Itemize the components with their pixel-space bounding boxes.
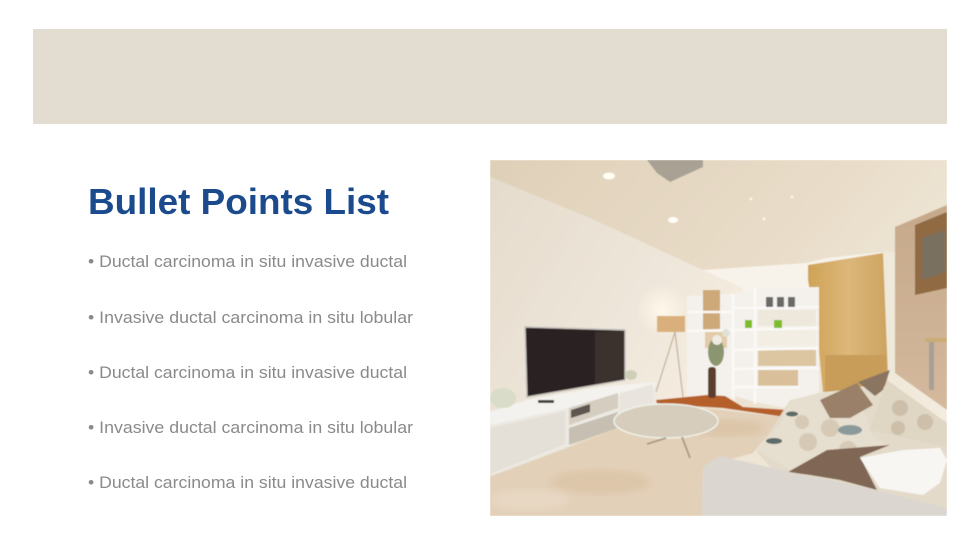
shelf ornaments [766,297,795,307]
wood wall [895,205,947,410]
bullet 1: • Ductal carcinoma in situ invasive ductal [88,252,407,271]
left wall [490,177,743,422]
photo: living room [490,160,947,516]
bullet 3: • Ductal carcinoma in situ invasive ductal [88,363,407,382]
lights [603,172,793,223]
flowers [490,388,516,408]
rug [490,403,783,516]
sofa arm [702,456,947,516]
ceiling vent [647,160,703,182]
curtain [808,253,888,392]
glass table [614,404,718,458]
bullet 2: • Invasive ductal carcinoma in situ lobular [88,308,413,327]
tv stand [490,382,655,476]
wood floor [656,395,787,417]
text block: heading and bullets [88,181,413,492]
ceiling [490,160,947,516]
shelving unit [687,287,819,408]
painting [915,212,947,295]
bright back wall [703,252,883,310]
TV [525,327,625,397]
lamp glow [636,284,688,336]
banner [33,29,947,124]
brown pillows [820,383,873,418]
remote [538,400,554,403]
sofa base [757,385,947,510]
side frame [925,338,947,342]
bullet list [88,252,413,492]
shelf interiors [703,290,720,330]
title: Bullet Points List [88,181,389,222]
bullet 4: • Invasive ductal carcinoma in situ lobular [88,418,413,437]
vase and plant [708,329,730,398]
white pillow [860,448,947,495]
floor lamp [657,316,685,332]
back cushion [870,380,947,447]
sofa seat [757,390,890,470]
window light [883,252,895,374]
bullet 5: • Ductal carcinoma in situ invasive ductal [88,473,407,492]
